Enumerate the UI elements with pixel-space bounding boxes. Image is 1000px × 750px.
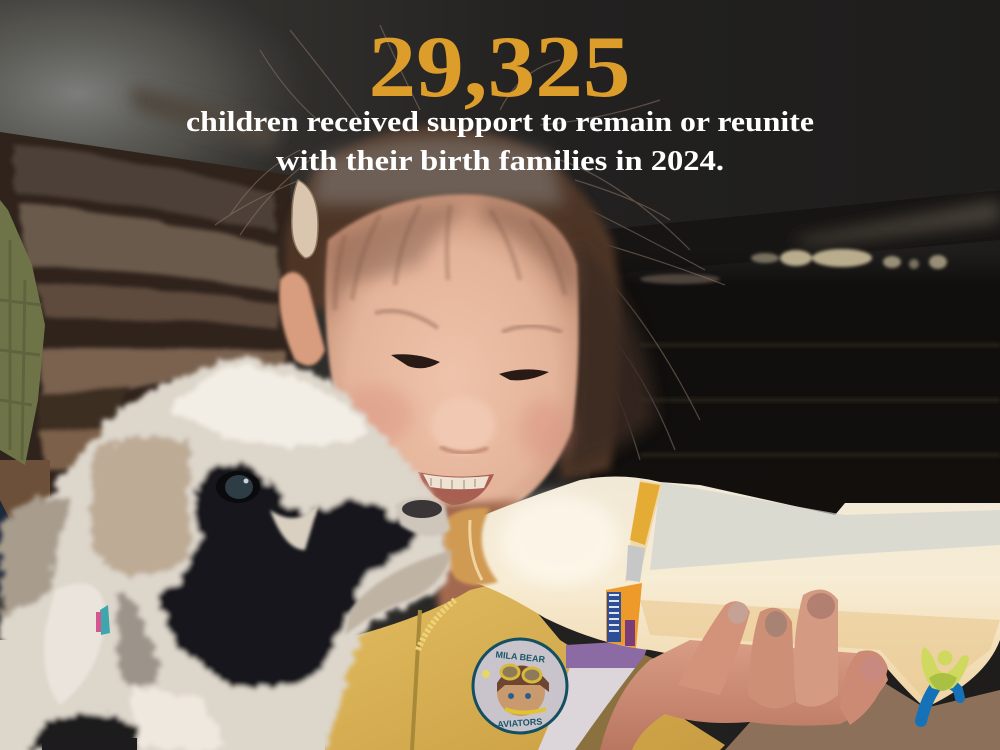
patch: Mila Bear Aviators: AVIATORS	[497, 716, 543, 730]
headline number: 29,325	[368, 19, 630, 116]
girl's hand holding the bottle	[600, 590, 888, 750]
eye	[216, 471, 260, 503]
supporting text: with their birth families in 2024.	[276, 145, 724, 177]
ground	[725, 680, 1000, 750]
supporting text	[186, 106, 814, 177]
bottle label	[625, 480, 662, 582]
nose	[431, 397, 495, 453]
eyes	[391, 354, 440, 368]
milk bottle	[443, 476, 1000, 708]
supporting text: children received support to remain or reunite	[186, 106, 814, 138]
black face markings	[160, 466, 420, 688]
bangs	[335, 205, 565, 310]
yellow hoodie	[325, 580, 725, 750]
wool base at the frame edge	[0, 640, 325, 750]
adult's green sleeve	[0, 200, 45, 600]
girl: neck shadow	[430, 500, 545, 625]
patch: Mila Bear Aviators	[473, 639, 567, 733]
bright gaps in the far wall	[640, 249, 947, 284]
hair clip	[292, 180, 318, 258]
girl: hair	[285, 125, 655, 480]
bottle cap	[443, 508, 498, 585]
lamb	[0, 358, 452, 750]
mouth	[418, 472, 494, 505]
patch lettering: MILA BEAR	[495, 649, 546, 665]
wool body	[0, 358, 448, 750]
girl: flyaway hair	[215, 25, 725, 460]
girl: face	[279, 180, 579, 510]
muzzle	[345, 550, 452, 635]
log wall	[0, 132, 295, 560]
logo	[921, 647, 969, 721]
eyebrows	[375, 311, 438, 328]
lamb ear	[44, 583, 105, 705]
ear	[279, 272, 325, 366]
nose	[402, 500, 442, 518]
